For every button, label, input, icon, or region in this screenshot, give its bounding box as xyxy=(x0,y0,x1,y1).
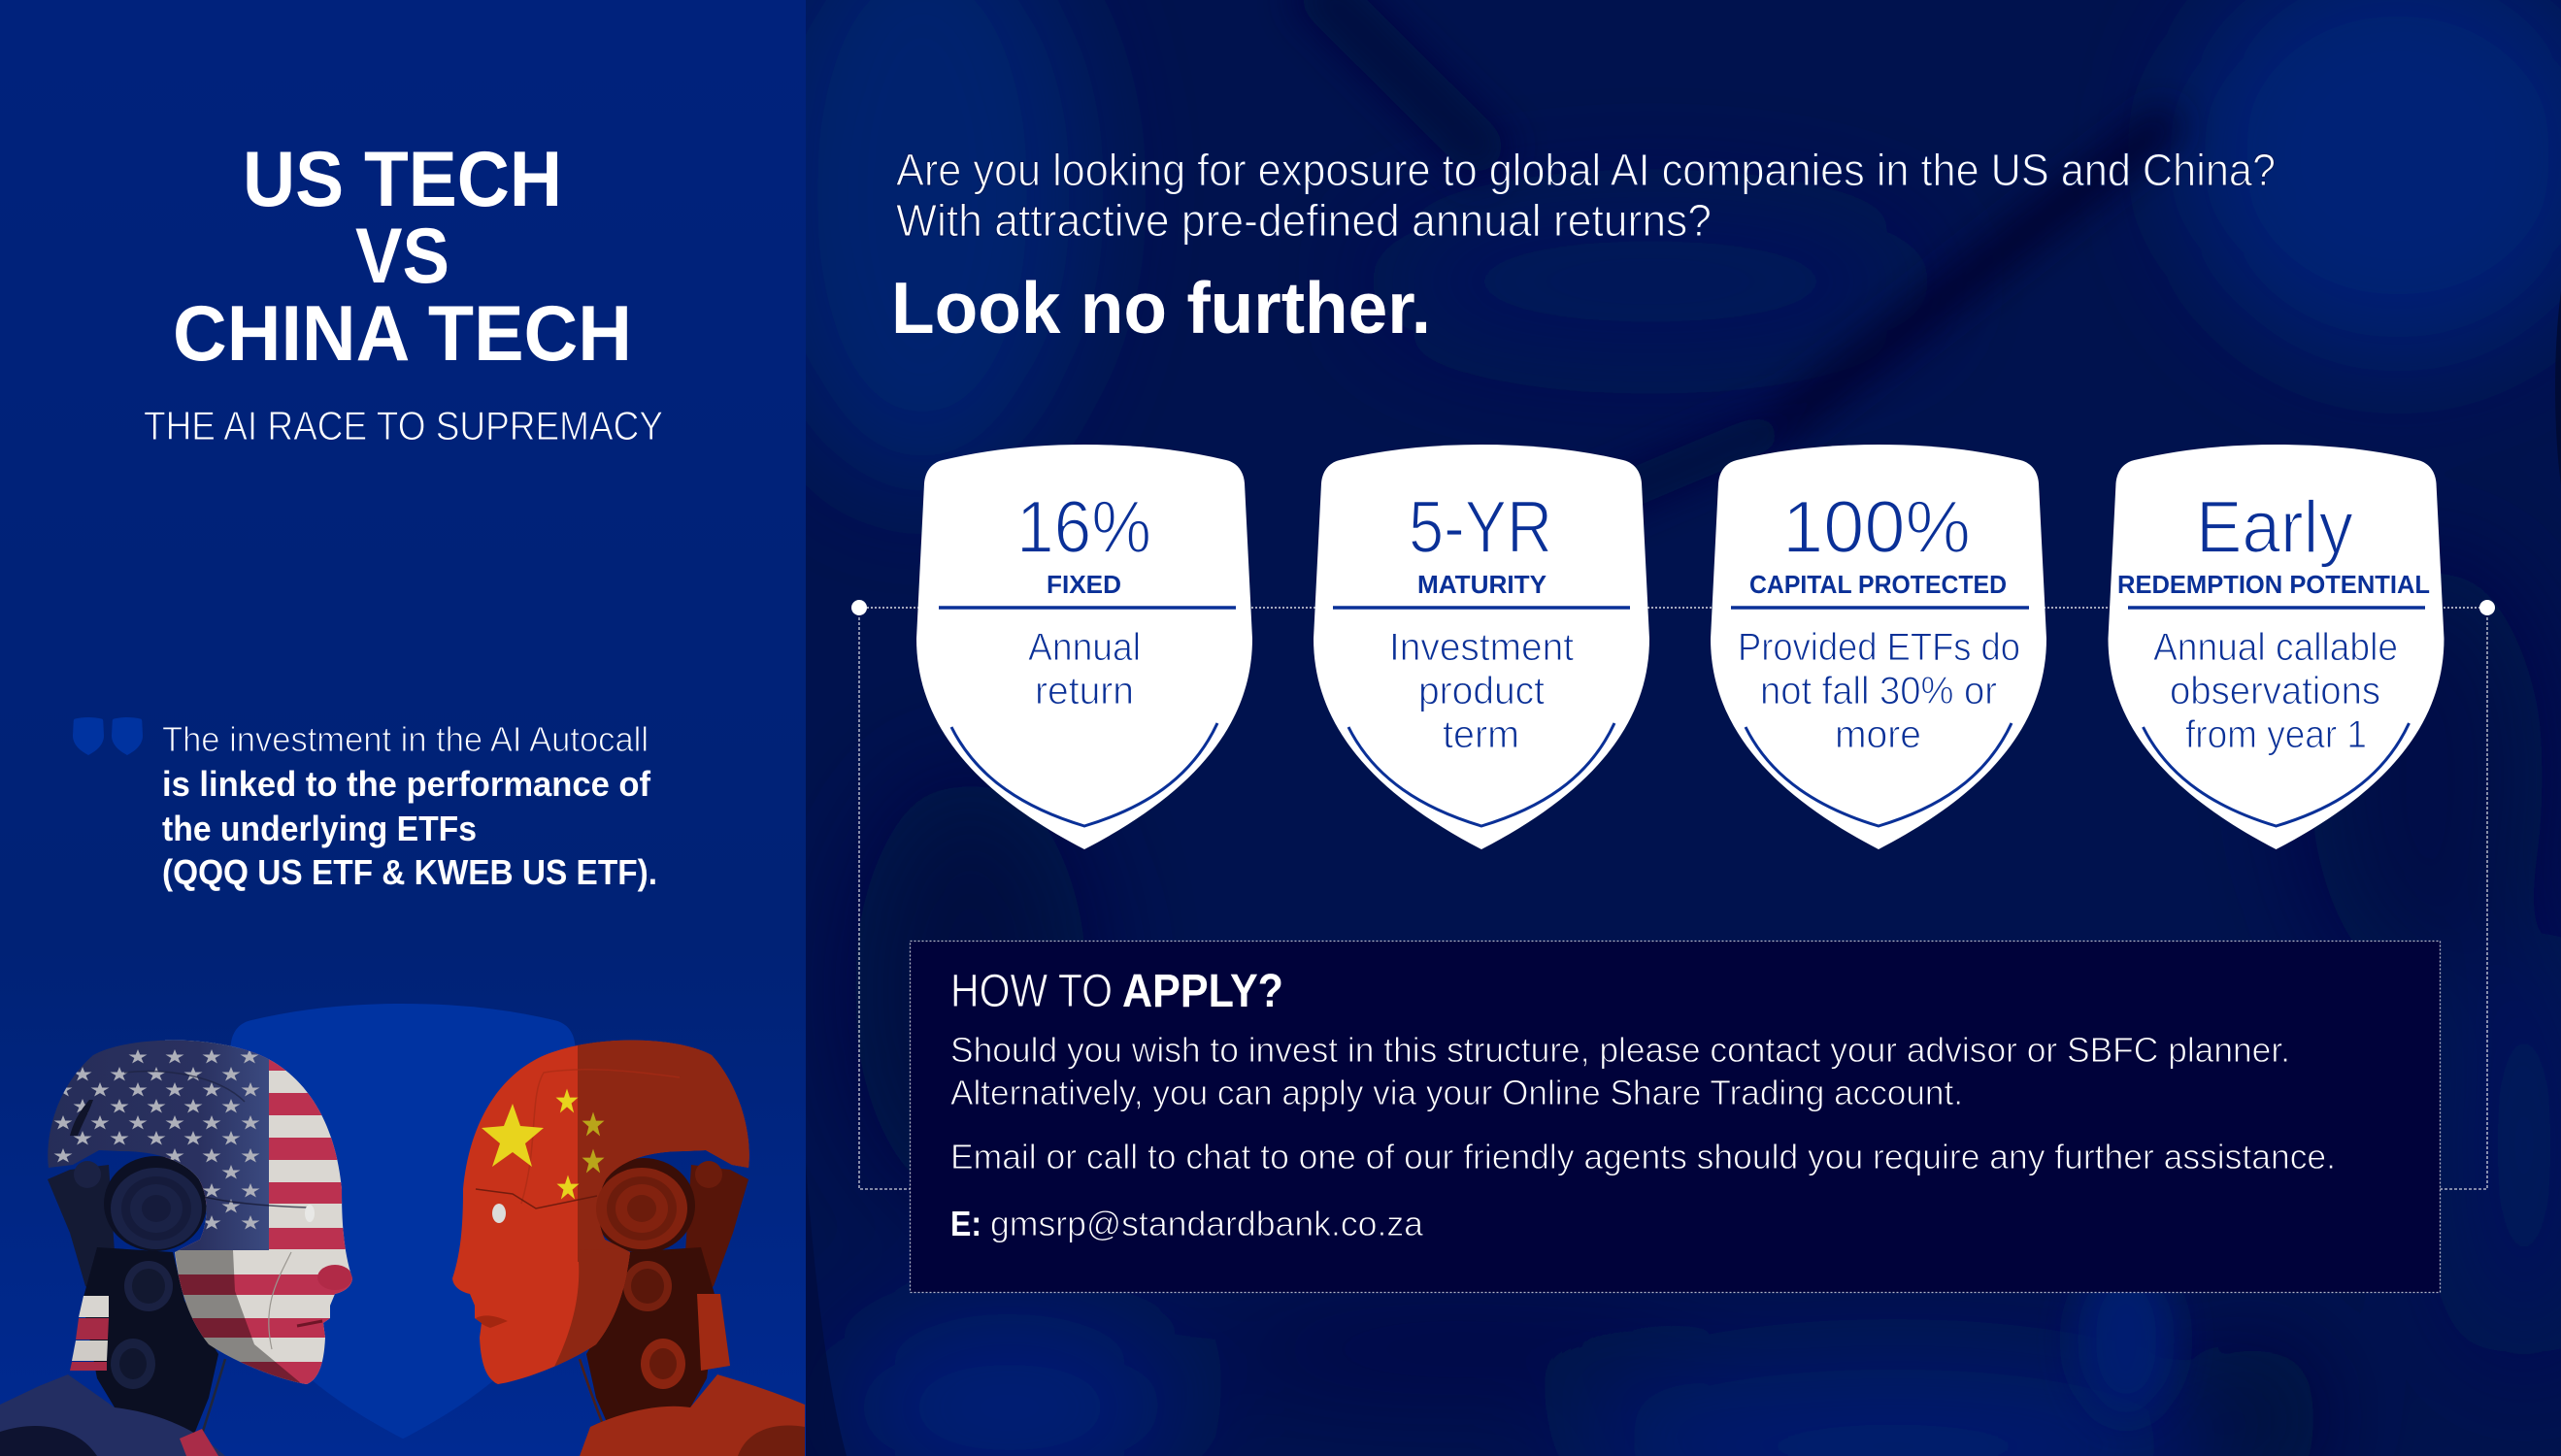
background shield behind heads xyxy=(222,1004,583,1439)
card: early redemption potential: from year 1 xyxy=(2185,713,2367,756)
back armour xyxy=(685,1165,748,1296)
card: 5-yr maturity: product xyxy=(1418,670,1545,712)
heading: how to apply: HOW TO xyxy=(950,966,1113,1017)
card: 5-yr maturity: Investment xyxy=(1389,626,1574,669)
card: early redemption potential: Early xyxy=(2196,486,2353,569)
ear disc xyxy=(596,1168,687,1249)
card: 16% fixed: 16% xyxy=(1016,486,1151,569)
card: 5-yr maturity xyxy=(1314,445,1649,849)
card: 5-yr maturity: 5-YR xyxy=(1409,486,1552,569)
card: 16% fixed: return xyxy=(1035,670,1134,712)
quote text: (QQQ US ETF & KWEB US ETF). xyxy=(162,852,657,892)
quote text: is linked to the performance of xyxy=(162,764,651,804)
neck xyxy=(83,1247,218,1446)
heading: how to apply xyxy=(950,966,1283,1017)
ear disc xyxy=(111,1168,202,1249)
quote text: the underlying ETFs xyxy=(162,809,477,848)
ear surround xyxy=(592,1158,695,1253)
body text: Alternatively, you can apply via your Online Share Trading account. xyxy=(950,1073,1963,1112)
title: US TECH xyxy=(243,136,562,223)
card: 5-yr maturity: MATURITY xyxy=(1417,570,1547,599)
intro text: Are you looking for exposure to global AI companies in the US and China? xyxy=(896,145,2276,195)
flag stars xyxy=(482,1089,604,1199)
body text xyxy=(950,1030,2336,1176)
eye xyxy=(305,1205,315,1222)
card: 16% fixed: FIXED xyxy=(1047,570,1121,599)
shoulder xyxy=(0,1374,225,1456)
card: early redemption potential: Annual callable xyxy=(2153,626,2398,669)
ear surround xyxy=(104,1156,207,1251)
panel: how to apply xyxy=(911,942,2441,1293)
lower discs xyxy=(623,1261,672,1311)
card: 100% capital protected: more xyxy=(1835,713,1921,756)
heading: look no further: Look no further. xyxy=(891,267,1431,348)
illustration: China flag robot head xyxy=(447,1029,805,1456)
neck strip xyxy=(697,1294,730,1371)
neck xyxy=(586,1247,715,1420)
card: early redemption potential xyxy=(2109,445,2445,849)
intro text: With attractive pre-defined annual returns? xyxy=(896,195,1712,246)
contact email: gmsrp@standardbank.co.za xyxy=(990,1204,1424,1243)
card: 100% capital protected: 100% xyxy=(1782,486,1971,569)
card: 100% capital protected: CAPITAL PROTECTED xyxy=(1749,570,2007,599)
back armour xyxy=(48,1165,115,1296)
card: 100% capital protected: Provided ETFs do xyxy=(1738,626,2020,669)
body text: Should you wish to invest in this structure, please contact your advisor or SBFC planner. xyxy=(950,1030,2290,1070)
heading: how to apply: APPLY? xyxy=(1122,966,1283,1017)
quote text: The investment in the AI Autocall xyxy=(162,719,649,759)
connector: dotted line with end dots xyxy=(851,600,2495,1189)
background: dark blue silk texture xyxy=(757,0,2561,1456)
contact email: E: xyxy=(950,1204,981,1243)
icon: quote marks xyxy=(73,717,143,755)
card: 5-yr maturity: term xyxy=(1443,713,1519,756)
lower discs xyxy=(124,1261,173,1311)
intro text xyxy=(896,145,2276,246)
helmet and face xyxy=(447,1029,762,1398)
eye xyxy=(492,1204,506,1223)
quote text xyxy=(162,719,657,892)
shoulder xyxy=(580,1374,805,1456)
title: CHINA TECH xyxy=(173,290,632,378)
body text: Email or call to chat to one of our friendly agents should you require any further assistance. xyxy=(950,1137,2336,1176)
card: 100% capital protected xyxy=(1711,445,2046,849)
card: 100% capital protected: not fall 30% or xyxy=(1760,670,1997,712)
title: VS xyxy=(355,213,449,300)
card: 16% fixed: Annual xyxy=(1028,626,1141,669)
helmet and face flag xyxy=(48,1041,352,1384)
neck stripes xyxy=(70,1296,109,1371)
illustration: US flag robot head xyxy=(0,1029,359,1456)
panel: left title column xyxy=(0,0,806,1456)
card: early redemption potential: REDEMPTION POTENTIAL xyxy=(2117,570,2430,599)
subtitle: THE AI RACE TO SUPREMACY xyxy=(144,403,663,448)
card: early redemption potential: observations xyxy=(2170,670,2380,712)
card: 16% fixed xyxy=(916,445,1252,849)
title xyxy=(173,136,632,378)
